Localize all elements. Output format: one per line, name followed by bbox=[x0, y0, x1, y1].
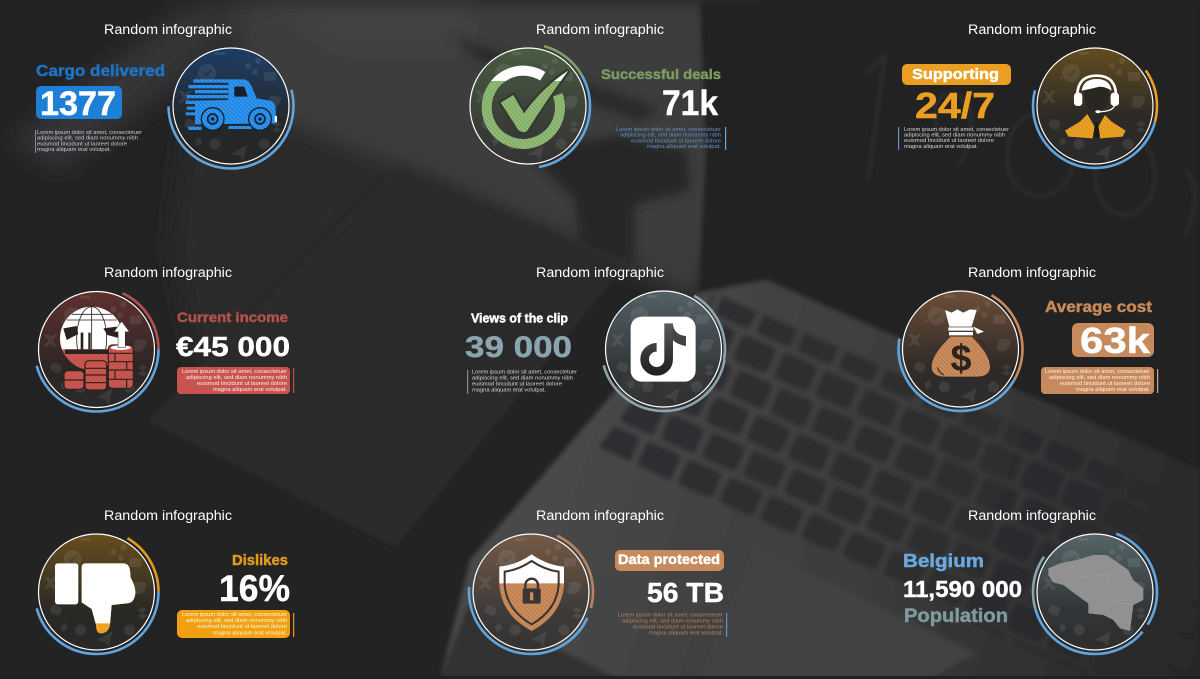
body text: magna aliquam erat volutpat. bbox=[649, 630, 723, 636]
body text bbox=[898, 127, 1009, 150]
icon: support agent in circle bbox=[1033, 44, 1157, 168]
body text on brown box bbox=[1041, 367, 1158, 394]
label: supporting: Supporting bbox=[912, 67, 999, 83]
heading: Random infographic bbox=[968, 265, 1096, 280]
body text: euismod tincidunt ut laoreet dolore bbox=[631, 138, 721, 144]
label: current income: Current income bbox=[177, 309, 288, 325]
body text: magna aliquam erat volutpat. bbox=[37, 147, 111, 153]
icon: truck in circle bbox=[168, 44, 294, 168]
stat: 71k: 71k bbox=[662, 84, 719, 123]
body text on orange box: euismod tincidunt ut laoreet dolore bbox=[197, 624, 287, 630]
heading: Random infographic bbox=[536, 508, 664, 523]
body text: euismod tincidunt ut laoreet dolore bbox=[633, 624, 723, 630]
stat: 39 000: 39 000 bbox=[465, 331, 572, 364]
panel: successful deals bbox=[466, 22, 726, 168]
body text bbox=[467, 370, 577, 394]
body text: adipiscing elit, sed diam nonummy nibh bbox=[622, 618, 723, 624]
label: population: Population bbox=[904, 606, 1008, 627]
body text on orange box: Lorem ipsum dolor sit amet, consectetuer bbox=[182, 612, 287, 618]
body text: Lorem ipsum dolor sit amet, consectetuer bbox=[904, 127, 1009, 133]
body text on red box: magna aliquam erat volutpat. bbox=[213, 387, 287, 393]
body text on red box: euismod tincidunt ut laoreet dolore bbox=[197, 381, 287, 387]
stat: 56 TB: 56 TB bbox=[647, 577, 724, 608]
stat: 24/7: 24/7 bbox=[915, 85, 995, 126]
label: successful deals: Successful deals bbox=[601, 66, 721, 82]
body text on red box: Lorem ipsum dolor sit amet, consectetuer bbox=[182, 369, 287, 375]
body text: magna aliquam erat volutpat. bbox=[647, 144, 721, 150]
body text: Lorem ipsum dolor sit amet, consectetuer bbox=[616, 127, 721, 133]
body text bbox=[616, 127, 726, 150]
panel: average cost bbox=[898, 265, 1158, 411]
body text bbox=[618, 612, 727, 637]
panel: supporting 24/7 bbox=[898, 22, 1157, 168]
label: average cost: Average cost bbox=[1045, 299, 1152, 316]
body text on orange box: adipiscing elit, sed diam nonummy nibh bbox=[186, 618, 287, 624]
stat: 11,590 000: 11,590 000 bbox=[903, 576, 1022, 602]
body text: magna aliquam erat volutpat. bbox=[472, 388, 546, 394]
stat: 1377: 1377 bbox=[40, 85, 116, 123]
icon: check mark in circle bbox=[466, 44, 590, 168]
heading: Random infographic bbox=[104, 508, 232, 523]
body text on red box: adipiscing elit, sed diam nonummy nibh bbox=[186, 375, 287, 381]
label: cargo delivered: Cargo delivered bbox=[36, 63, 165, 80]
body text: Lorem ipsum dolor sit amet, consectetuer bbox=[618, 612, 723, 618]
heading: Random infographic bbox=[968, 508, 1096, 523]
label: dislikes: Dislikes bbox=[232, 553, 288, 569]
body text: Lorem ipsum dolor sit amet, consectetuer bbox=[472, 370, 577, 376]
body text bbox=[35, 130, 142, 153]
body text: adipiscing elit, sed diam nonummy nibh bbox=[620, 133, 721, 139]
body text on orange box: magna aliquam erat volutpat. bbox=[213, 630, 287, 636]
panel: current income bbox=[34, 265, 294, 412]
icon: thumbs down in circle bbox=[34, 530, 158, 654]
body text: adipiscing elit, sed diam nonummy nibh bbox=[904, 133, 1005, 139]
body text on brown box: adipiscing elit, sed diam nonummy nibh bbox=[1049, 375, 1150, 381]
body text: adipiscing elit, sed diam nonummy nibh bbox=[472, 376, 573, 382]
body text on brown box: magna aliquam erat volutpat. bbox=[1076, 387, 1150, 393]
label: Belgium: Belgium bbox=[903, 551, 984, 571]
icon: video app logo in circle bbox=[602, 287, 726, 411]
heading: Random infographic bbox=[536, 22, 664, 37]
body text: adipiscing elit, sed diam nonummy nibh bbox=[37, 136, 138, 142]
body text on red box bbox=[177, 367, 294, 394]
heading: Random infographic bbox=[104, 265, 232, 280]
label: views of the clip: Views of the clip bbox=[471, 312, 568, 326]
icon: shield and padlock in circle bbox=[469, 530, 593, 654]
body text: Lorem ipsum dolor sit amet, consectetuer bbox=[37, 130, 142, 136]
icon: money bag in circle bbox=[898, 287, 1022, 411]
heading: Random infographic bbox=[104, 22, 232, 37]
body text on orange box bbox=[177, 610, 294, 638]
body text on brown box: euismod tincidunt ut laoreet dolore bbox=[1060, 381, 1150, 387]
heading: Random infographic bbox=[968, 22, 1096, 37]
heading: Random infographic bbox=[536, 265, 664, 280]
body text on brown box: Lorem ipsum dolor sit amet, consectetuer bbox=[1045, 369, 1150, 375]
label: data protected: Data protected bbox=[618, 552, 720, 567]
label: data protected bbox=[615, 550, 724, 571]
panel: belgium population bbox=[903, 508, 1157, 654]
panel: data protected bbox=[469, 508, 727, 654]
stat: 45 000 euros: €45 000 bbox=[176, 331, 290, 362]
icon: money bag in circle: $ bbox=[951, 337, 972, 379]
icon: globe and coins in circle bbox=[34, 288, 158, 412]
label: supporting bbox=[902, 64, 1011, 85]
panel: cargo delivered bbox=[35, 22, 294, 168]
stat: 16%: 16% bbox=[219, 568, 290, 609]
body text: euismod tincidunt ut laoreet dolore bbox=[37, 141, 127, 147]
panel: views of the clip bbox=[465, 265, 726, 411]
panel: dislikes bbox=[34, 508, 294, 654]
body text: euismod tincidunt ut laoreet dolore bbox=[472, 382, 562, 388]
body text: magna aliquam erat volutpat. bbox=[904, 144, 978, 150]
body text: euismod tincidunt ut laoreet dolore bbox=[904, 138, 994, 144]
icon: map of Belgium in circle bbox=[1033, 530, 1157, 654]
stat: 63k: 63k bbox=[1080, 320, 1151, 361]
